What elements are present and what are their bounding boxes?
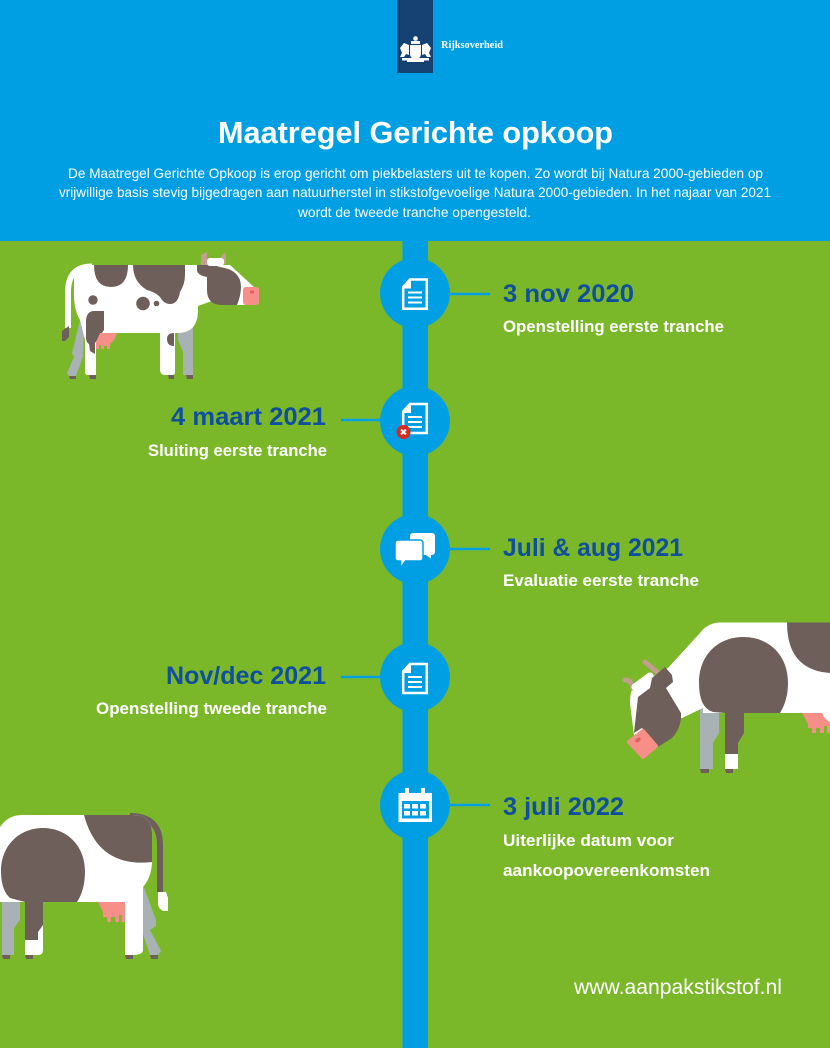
timeline node: 4 maart 2021 <box>380 386 450 456</box>
website url: www.aanpakstikstof.nl <box>573 976 782 999</box>
panel: green field background <box>0 241 830 1048</box>
icon: speech bubbles <box>410 533 435 558</box>
timeline node: 3 juli 2022 <box>380 770 450 840</box>
illustration: cow rear bottom left <box>0 815 168 959</box>
event: 3 nov 2020 <box>503 280 724 336</box>
event: 4 maart 2021: Sluiting eerste tranche <box>148 441 327 460</box>
event: 4 maart 2021: 4 maart 2021 <box>171 403 326 431</box>
event: Juli & aug 2021: Juli & aug 2021 <box>503 534 683 562</box>
illustration: standing cow top left <box>62 252 259 379</box>
timeline line <box>402 241 428 1048</box>
event: 3 juli 2022: 3 juli 2022 <box>503 793 624 821</box>
event: 3 juli 2022: Uiterlijke datum voor <box>503 831 674 850</box>
event: Nov/dec 2021: Openstelling tweede tranche <box>96 699 327 718</box>
timeline node: Nov/dec 2021 <box>380 642 450 712</box>
event: Juli & aug 2021 <box>503 534 699 590</box>
logo: Rijksoverheid <box>397 0 503 73</box>
event: 3 nov 2020: 3 nov 2020 <box>503 280 634 308</box>
event: 3 juli 2022 <box>503 793 710 880</box>
panel: blue header <box>0 0 830 241</box>
intro paragraph: wordt de tweede tranche opengesteld. <box>297 204 531 220</box>
icon: red cross badge <box>396 425 410 439</box>
logo ribbon <box>397 0 433 73</box>
timeline node: Juli & aug 2021 <box>380 514 450 584</box>
intro paragraph: De Maatregel Gerichte Opkoop is erop gericht om piekbelasters uit te kopen. Zo wordt bij Natura 2000-gebieden op <box>68 165 763 181</box>
intro paragraph <box>59 165 771 220</box>
timeline node: 3 nov 2020 <box>380 258 450 328</box>
intro paragraph: vrijwillige basis stevig bijgedragen aan natuurherstel in stikstofgevoelige Natura 2000-gebieden. In het najaar van 2021 <box>59 184 771 200</box>
event: Nov/dec 2021 <box>96 662 327 718</box>
event: 4 maart 2021 <box>148 403 327 460</box>
event: Juli & aug 2021: Evaluatie eerste tranche <box>503 571 699 590</box>
illustration: grazing cow right <box>625 622 830 773</box>
title: Maatregel Gerichte opkoop <box>218 115 613 150</box>
icon: document <box>403 404 427 433</box>
icon: royal coat of arms <box>400 36 431 62</box>
event: 3 juli 2022: aankoopovereenkomsten <box>503 861 710 880</box>
timeline connectors <box>341 294 490 805</box>
event: Nov/dec 2021: Nov/dec 2021 <box>166 662 326 690</box>
logo wordmark: Rijksoverheid <box>441 40 503 51</box>
icon: document <box>403 664 427 693</box>
icon: document <box>403 280 427 309</box>
icon: calendar <box>398 788 432 822</box>
event: 3 nov 2020: Openstelling eerste tranche <box>503 317 724 336</box>
